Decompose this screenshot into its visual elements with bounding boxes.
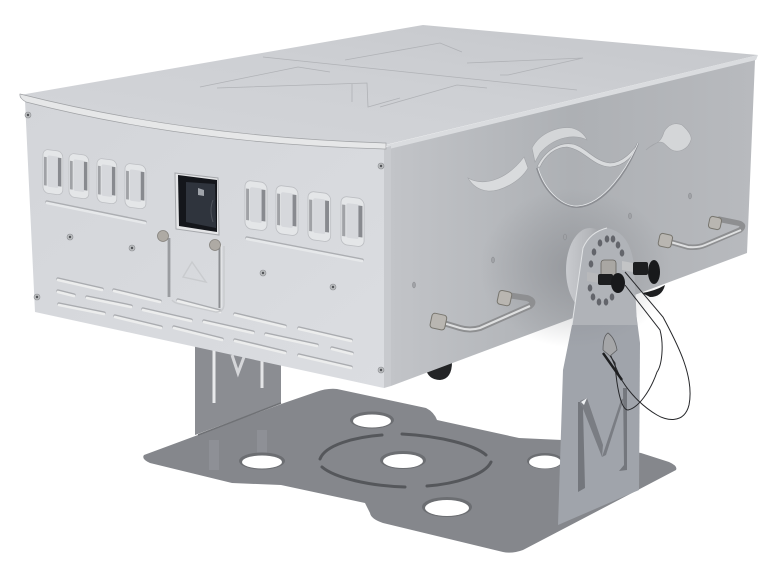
- lens window: [175, 173, 219, 235]
- base plate: [143, 389, 676, 553]
- adjustment hole ring: [588, 235, 624, 306]
- wave logo: [468, 124, 691, 207]
- safety wires: [606, 272, 690, 419]
- right face screws: [412, 193, 692, 288]
- left vent slots: [43, 149, 146, 209]
- back bracket leg: [195, 340, 281, 435]
- letter M: [578, 388, 627, 492]
- projector enclosure front face: [20, 94, 391, 388]
- embossed bars: [47, 202, 362, 261]
- projector enclosure top face: [20, 25, 758, 145]
- rotating hub and disc: [566, 228, 637, 325]
- embossed top panel lines: [200, 43, 583, 107]
- left handle: [429, 290, 532, 330]
- rubber foot: [425, 362, 452, 380]
- front screws: [25, 112, 384, 373]
- locking knobs and safety wires: [587, 260, 690, 419]
- right vent slots: [245, 180, 364, 247]
- lens latch: [158, 230, 224, 312]
- lower vent louvers: [58, 279, 352, 368]
- ring slots: [320, 434, 491, 487]
- front mounting bracket with M: [558, 305, 640, 525]
- projector enclosure right face: [386, 55, 758, 386]
- right handle: [658, 216, 743, 248]
- top lid lip: [20, 94, 386, 149]
- mounting holes: [239, 412, 563, 517]
- wire eyelet: [603, 333, 622, 380]
